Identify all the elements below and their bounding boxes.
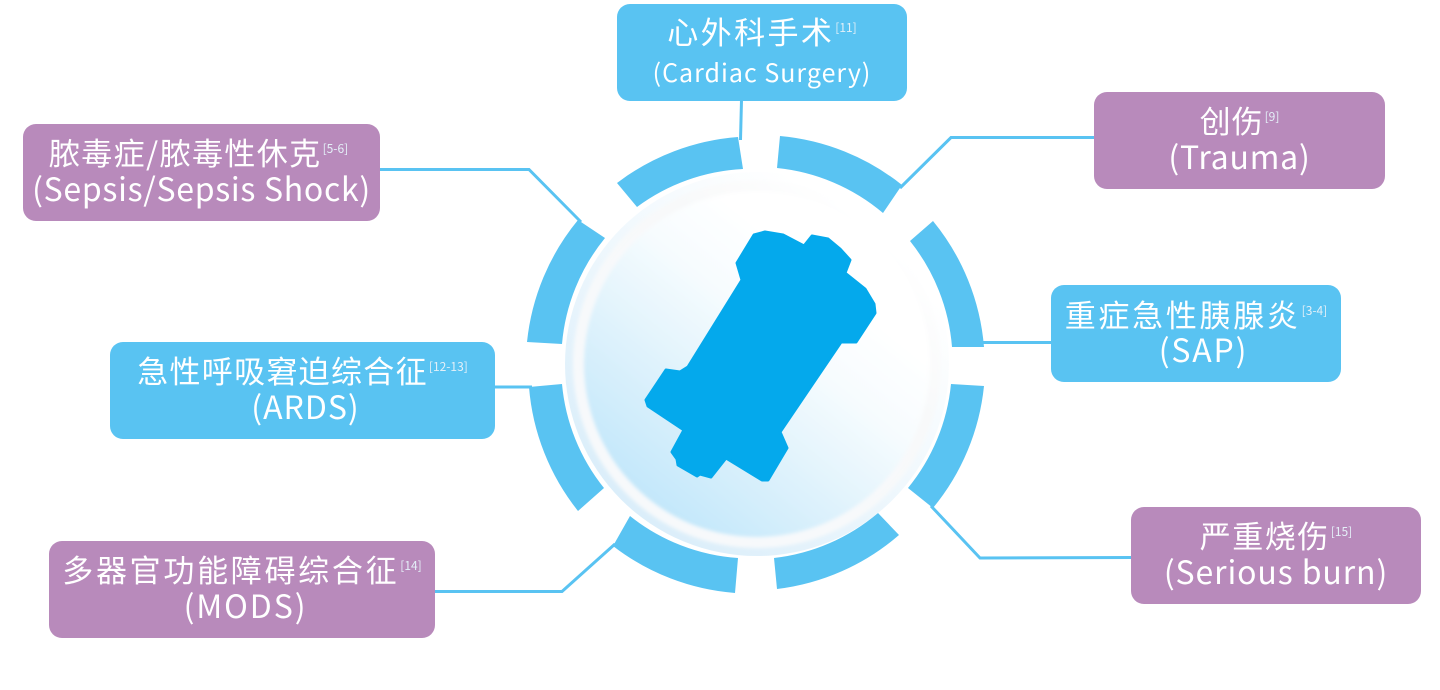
label: MODS [49, 541, 435, 638]
label: serious burn: 严重烧伤[15] [1200, 512, 1352, 557]
label: MODS: 多器官功能障碍综合征[14] [62, 546, 422, 591]
connector: trauma [900, 138, 1095, 188]
label: ARDS: (ARDS) [251, 383, 360, 429]
label: ARDS [110, 342, 495, 439]
label: cardiac surgery: 心外科手术[11] [667, 8, 857, 53]
label: MODS: (MODS) [184, 582, 307, 628]
label: trauma: 创伤[9] [1200, 97, 1279, 142]
icon: blood filter cartridge [646, 232, 875, 480]
label: severe acute pancreatitis: (SAP) [1159, 326, 1248, 372]
connector: serious burn [931, 506, 1132, 558]
label: trauma: (Trauma) [1168, 133, 1311, 179]
label: sepsis and septic shock: 脓毒症/脓毒性休克[5-6] [49, 129, 348, 174]
connector: MODS [435, 544, 615, 592]
central disc [565, 172, 949, 556]
label: cardiac surgery [617, 4, 907, 101]
label: serious burn [1131, 507, 1421, 604]
label: sepsis and septic shock: (Sepsis/Sepsis Shock) [32, 165, 371, 211]
connector: sepsis [380, 170, 581, 222]
label: trauma [1094, 92, 1385, 189]
label: severe acute pancreatitis [1051, 285, 1341, 382]
connector: SAP [980, 341, 1052, 344]
connector: cardiac surgery [740, 100, 742, 140]
label: cardiac surgery: (Cardiac Surgery) [653, 54, 871, 90]
connector: ARDS [495, 386, 532, 388]
segmented ring [527, 136, 984, 593]
label: sepsis and septic shock [23, 124, 380, 221]
label: severe acute pancreatitis: 重症急性胰腺炎[3-4] [1065, 291, 1327, 336]
label: ARDS: 急性呼吸窘迫综合征[12-13] [137, 347, 468, 392]
label: serious burn: (Serious burn) [1164, 548, 1388, 594]
